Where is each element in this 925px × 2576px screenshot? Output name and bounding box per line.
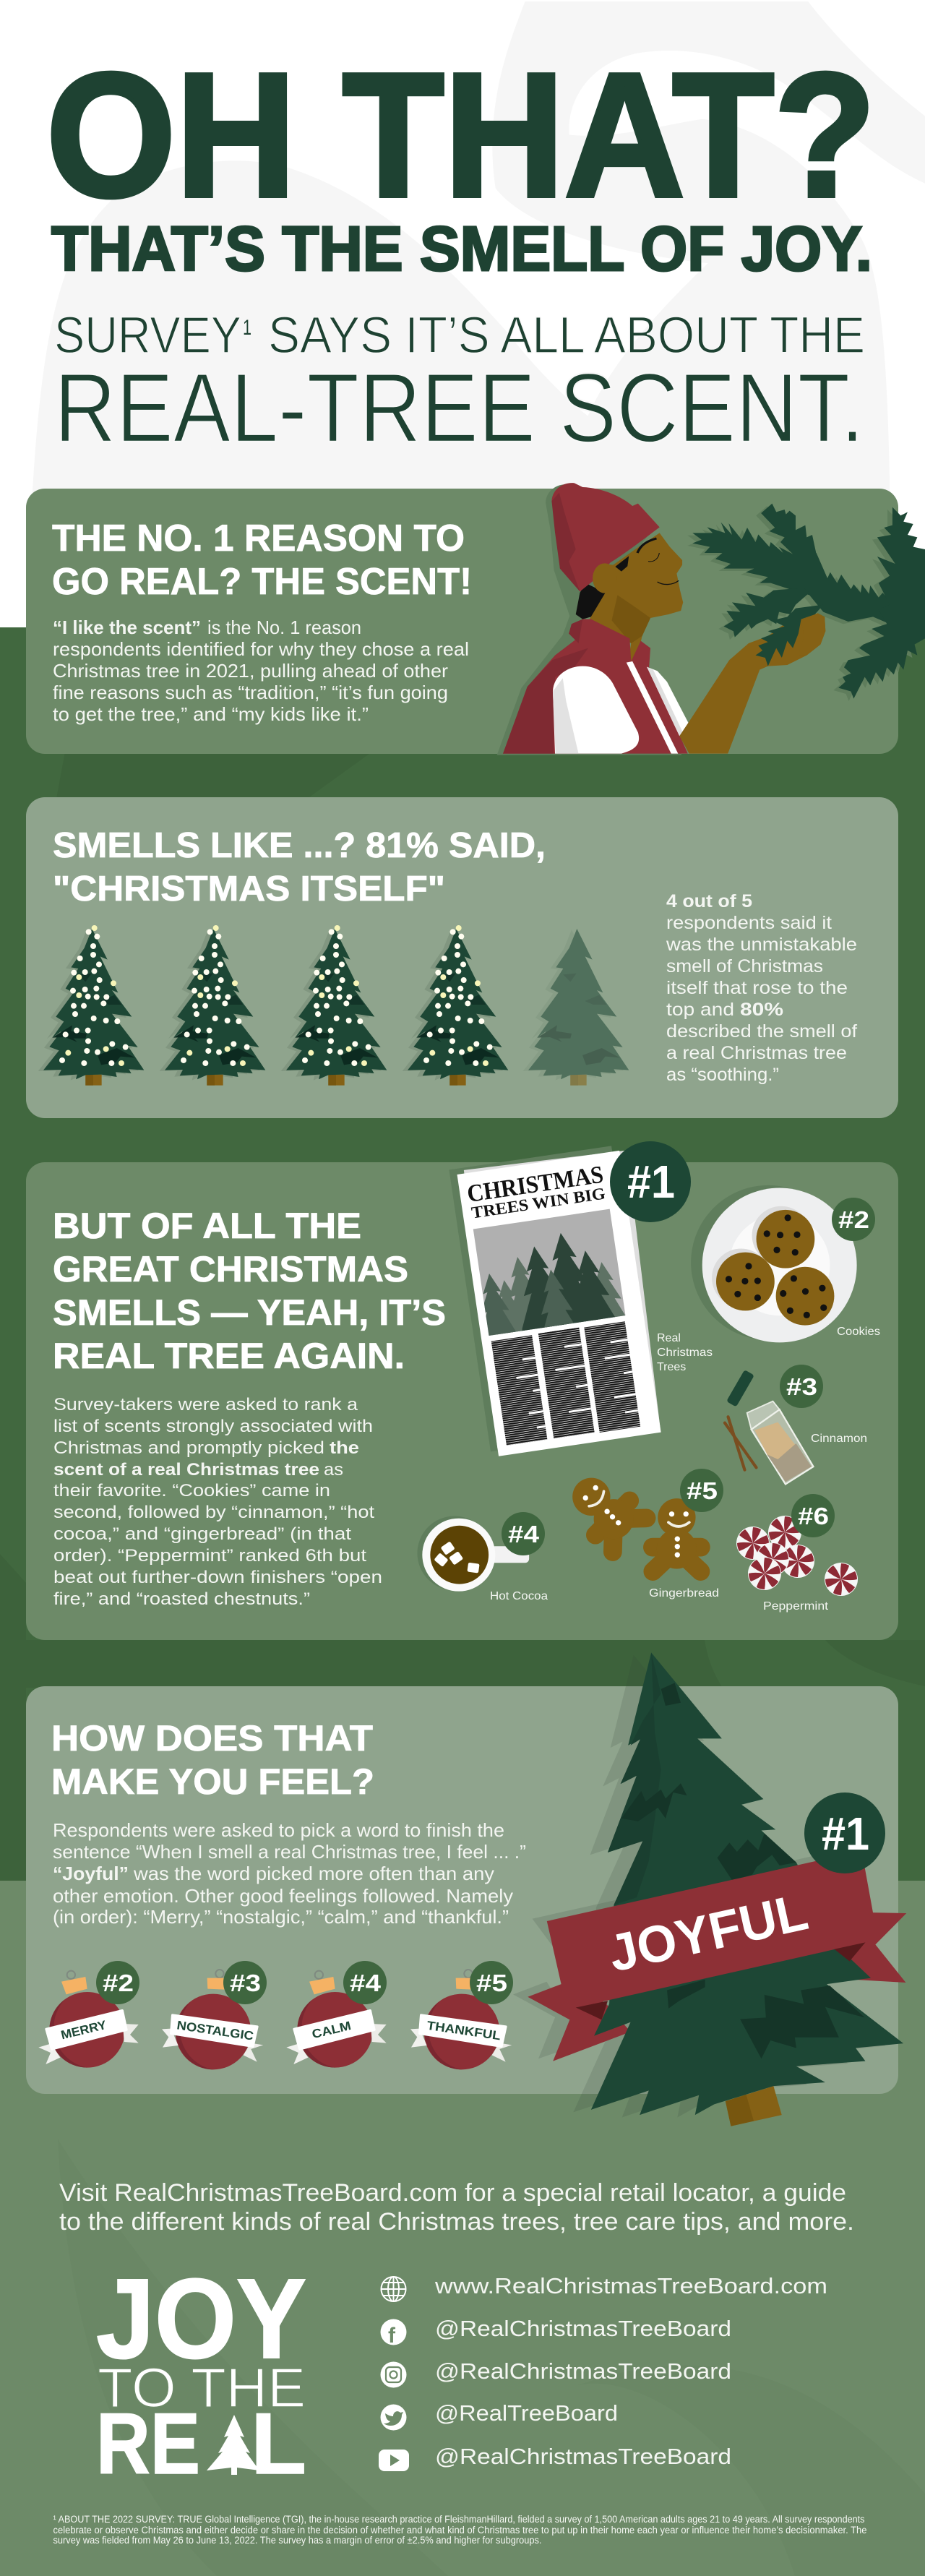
text: survey-takers: second, followed by “cinnamon,” “hot (53, 1503, 374, 1522)
text: 4 out of 5: was the unmistakable (666, 935, 857, 955)
text: 4 out of 5: 80% (740, 1000, 783, 1020)
badge: #2: #2 (103, 1970, 134, 1996)
icon: twitter (380, 2404, 406, 2430)
text: 4 out of 5: described the smell of (666, 1021, 857, 1042)
label: real christmas trees (657, 1332, 713, 1373)
label: hot cocoa: Hot Cocoa (490, 1590, 548, 1602)
text: 4 out of 5: 4 out of 5 (666, 891, 752, 911)
text: why real: Christmas tree in 2021, pulling ahead of other (53, 660, 448, 682)
logo: joy to the real: L (251, 2395, 306, 2492)
text: twitter handle: @RealTreeBoard (435, 2400, 618, 2426)
text: why real: is the No. 1 reason (207, 617, 361, 638)
newspaper headline: CHRISTMAS (465, 1162, 605, 1208)
ornament: nostalgic (162, 1961, 267, 2069)
heading: no. 1 reason (52, 518, 472, 603)
logo: joy to the real: TO THE (98, 2357, 306, 2419)
badge: #1 newspaper: #1 (627, 1156, 675, 1208)
ornament: calm: CALM (311, 2019, 353, 2041)
illustration: cinnamon (725, 1370, 813, 1484)
ornament: calm (286, 1961, 387, 2068)
subtitle: that's the smell of joy: THAT’S THE SMELL OF JOY. (51, 214, 872, 284)
heading: smells like: "CHRISTMAS ITSELF" (53, 870, 445, 909)
text: survey-takers: list of scents strongly associated with (53, 1417, 373, 1436)
text: why real: fine reasons such as “tradition,” “it’s fun going (53, 682, 448, 703)
heading: great christmas smells: SMELLS — YEAH, IT’S (53, 1292, 446, 1333)
heading: great christmas smells: REAL TREE AGAIN. (53, 1336, 405, 1376)
subtitle: survey says (54, 307, 865, 364)
contact list (379, 2273, 827, 2471)
badge: #5 gingerbread: #5 (687, 1477, 718, 1504)
tree 2 lit (160, 925, 265, 1086)
heading: feel: MAKE YOU FEEL? (51, 1761, 374, 1802)
badge: #2 cookies: #2 (838, 1206, 869, 1233)
badge: #4 hot cocoa: #4 (508, 1521, 540, 1547)
panel: how does that make you feel (26, 1686, 898, 2094)
badge: #4 (343, 1961, 387, 2004)
label: gingerbread: Gingerbread (649, 1587, 719, 1600)
heading: great christmas smells: BUT OF ALL THE (53, 1206, 361, 1246)
label: peppermint: Peppermint (763, 1600, 829, 1613)
text: 4 out of 5: a real Christmas tree (666, 1043, 847, 1063)
text: respondents: “Joyful” (53, 1863, 129, 1884)
label: real christmas trees: Real (657, 1332, 681, 1344)
tree 3 lit (281, 925, 387, 1086)
badge: #1 joyful (804, 1793, 885, 1873)
footnote: celebrate or observe Christmas and either decide or share in the decision of whether and what kind of Christmas tree to put up in their home each year or influence their home’s decisionmaker. The (53, 2525, 867, 2536)
text: respondents: Respondents were asked to pick a word to finish the (53, 1819, 504, 1841)
badge: #3 (223, 1961, 267, 2004)
text: respondents: (in order): “Merry,” “nostalgic,” “calm,” and “thankful.” (53, 1906, 509, 1928)
tree 1 lit (38, 925, 144, 1086)
text: 4 out of 5: respondents said it (666, 913, 832, 933)
logo tree (207, 2415, 259, 2475)
text: 4 out of 5: smell of Christmas (666, 956, 823, 976)
illustration: newspaper (447, 1143, 668, 1458)
text: respondents: sentence “When I smell a real Christmas tree, I feel ... .” (53, 1841, 526, 1863)
text: survey-takers: fire,” and “roasted chestnuts.” (53, 1589, 310, 1609)
text: 4 out of 5: top and (666, 1000, 734, 1020)
text: why real: respondents identified for why they chose a real (53, 638, 469, 660)
badge: #1 newspaper (610, 1141, 691, 1222)
text: visit website (59, 2179, 854, 2236)
text: survey-takers: Christmas and promptly picked (53, 1438, 324, 1458)
label: cinnamon: Cinnamon (811, 1433, 867, 1445)
text: visit website: to the different kinds of real Christmas trees, tree care tips, and more. (59, 2208, 854, 2236)
heading: smells like (53, 826, 546, 909)
panel: no. 1 reason (26, 483, 925, 755)
heading: feel: HOW DOES THAT (51, 1718, 373, 1759)
ornament: merry (38, 1961, 139, 2068)
ornament: thankful: THANKFUL (426, 2019, 502, 2043)
logo: joy to the real: RE (96, 2395, 200, 2492)
label: cookies: Cookies (837, 1326, 880, 1338)
panel: smells like (26, 797, 898, 1118)
subtitle: survey says: SAYS IT’S ALL ABOUT THE (268, 307, 865, 364)
tree 5 unlit (523, 929, 629, 1086)
badge: #6 peppermint (791, 1494, 835, 1537)
icon: youtube (379, 2450, 409, 2471)
text: website: www.RealChristmasTreeBoard.com (434, 2273, 827, 2298)
text: respondents: other emotion. Other good feelings followed. Namely (53, 1885, 513, 1907)
badge: #2 cookies (832, 1198, 875, 1241)
badge: #3 cinnamon: #3 (786, 1373, 817, 1400)
ornament: thankful (410, 1961, 513, 2069)
text: survey-takers (53, 1395, 382, 1609)
badge: #5 (470, 1961, 513, 2004)
heading: great christmas smells (53, 1206, 446, 1376)
badge: #3: #3 (230, 1970, 261, 1996)
logo: joy to the real: JOY (96, 2256, 306, 2382)
badge: #5: #5 (476, 1970, 507, 1996)
text: respondents: was the word picked more often than any (133, 1863, 494, 1884)
text: respondents (53, 1819, 526, 1928)
ornament: merry: MERRY (59, 2018, 108, 2042)
text: survey-takers: their favorite. “Cookies” came in (53, 1481, 330, 1500)
text: 4 out of 5 (666, 891, 857, 1085)
footnote: survey was fielded from May 26 to June 13, 2022. The survey has a margin of error of ±2.5% and higher for subgroups. (53, 2535, 542, 2546)
subtitle: survey says: 1 (243, 316, 251, 340)
text: why real: “I like the scent” (53, 617, 201, 638)
ornament: nostalgic: NOSTALGIC (176, 2018, 254, 2043)
text: survey-takers: beat out further-down finishers “open (53, 1568, 382, 1587)
icon: facebook (380, 2319, 406, 2348)
badge: #5 gingerbread (680, 1469, 723, 1512)
text: survey-takers: scent of a real Christmas tree (53, 1460, 319, 1480)
icon: instagram (380, 2362, 406, 2388)
illustration: gingerbread (561, 1467, 701, 1571)
text: survey-takers: as (324, 1460, 343, 1480)
title: OH THAT?: OH THAT? (46, 36, 876, 233)
icon: globe (382, 2277, 406, 2301)
heading: no. 1 reason: GO REAL? THE SCENT! (52, 561, 472, 603)
illustration: cookies (691, 1185, 857, 1342)
text: instagram handle: @RealChristmasTreeBoard (435, 2358, 731, 2384)
text: survey-takers: order). “Peppermint” ranked 6th but (53, 1546, 366, 1566)
text: survey-takers: Survey-takers were asked to rank a (53, 1395, 358, 1414)
footnote (53, 2514, 867, 2546)
logo: joy to the real (96, 2256, 306, 2492)
badge: #3 cinnamon (780, 1365, 823, 1408)
illustration: hot cocoa (417, 1516, 529, 1592)
newspaper headline: TREES WIN BIG (470, 1184, 606, 1222)
text: why real: to get the tree,” and “my kids like it.” (53, 703, 369, 725)
badge: #6 peppermint: #6 (798, 1503, 829, 1529)
label: real christmas trees: Trees (657, 1361, 686, 1373)
label: real christmas trees: Christmas (657, 1347, 713, 1359)
subtitle: survey says: SURVEY (54, 307, 241, 364)
badge: #4 hot cocoa (502, 1512, 545, 1555)
tree 4 lit (403, 925, 508, 1086)
heading: no. 1 reason: THE NO. 1 REASON TO (52, 518, 465, 559)
heading: great christmas smells: GREAT CHRISTMAS (53, 1249, 408, 1289)
text: visit website: Visit RealChristmasTreeBoard.com for a special retail locator, a guide (59, 2179, 846, 2207)
text: survey-takers: cocoa,” and “gingerbread” (in that (53, 1524, 351, 1544)
banner label: joyful: JOYFUL (603, 1883, 813, 1983)
text: facebook handle: @RealChristmasTreeBoard (435, 2316, 731, 2341)
illustration: person smelling branch (497, 483, 925, 755)
heading: smells like: SMELLS LIKE ...? 81% SAID, (53, 826, 546, 865)
icon: facebook: f (388, 2324, 396, 2348)
text: 4 out of 5: as “soothing.” (666, 1065, 779, 1085)
illustration: peppermints (735, 1516, 859, 1596)
text: why real (53, 617, 469, 725)
text: youtube handle: @RealChristmasTreeBoard (435, 2444, 731, 2469)
badge: #4: #4 (350, 1970, 382, 1996)
text: survey-takers: the (330, 1438, 359, 1458)
heading: feel (51, 1718, 374, 1802)
badge: #1 joyful: #1 (822, 1808, 869, 1860)
illustration: big tree with joyful banner (513, 1652, 906, 2126)
badge: #2 (96, 1961, 139, 2004)
text: 4 out of 5: itself that rose to the (666, 978, 848, 998)
footnote: ¹ ABOUT THE 2022 SURVEY: TRUE Global Intelligence (TGI), the in-house research practice of FleishmanHillard, fielded a survey of 1,500 American adults ages 21 to 49 years. All survey respondents (53, 2514, 865, 2525)
chart: 4 of 5 lit trees (38, 925, 629, 1086)
panel: great christmas smells (26, 1141, 898, 1640)
